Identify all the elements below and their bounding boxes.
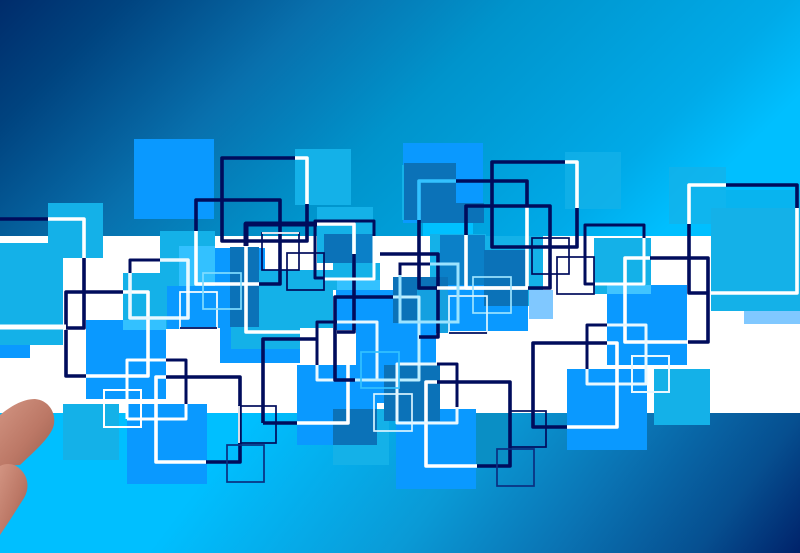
thin outlined squares [104, 233, 669, 486]
light and mid blue squares [0, 139, 800, 489]
icon: finger tips [0, 399, 54, 535]
thick outlined squares [0, 158, 797, 466]
